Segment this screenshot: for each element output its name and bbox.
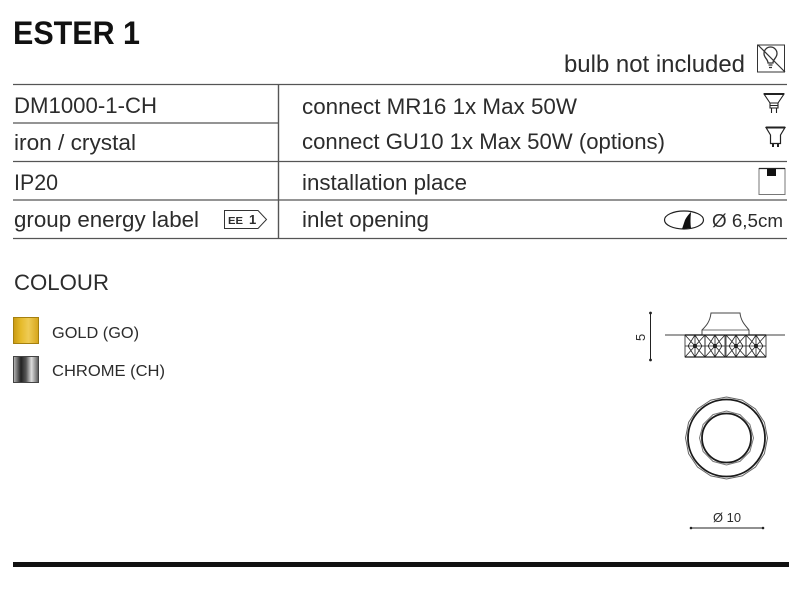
height dimension: 5 <box>633 334 648 341</box>
right column: installation place: installation place <box>302 170 467 195</box>
right column: inlet opening: inlet opening <box>302 207 429 232</box>
icon: energy label tag: 1 <box>249 212 256 227</box>
icon: installation place <box>759 168 785 194</box>
icon: energy label tag: EE <box>228 216 243 227</box>
bottom bar <box>13 562 789 567</box>
diameter dimension: Ø 10 <box>713 510 741 525</box>
right column: MR16 connection: connect MR16 1x Max 50W <box>302 94 577 119</box>
swatch: gold: GOLD (GO) <box>52 325 139 342</box>
icon: energy label tag <box>224 210 266 228</box>
swatch: chrome: CHROME (CH) <box>52 363 165 380</box>
left column: product code: DM1000-1-CH <box>14 93 157 118</box>
left column: energy label text: group energy label <box>14 207 199 232</box>
icon: MR16 bulb <box>764 94 784 113</box>
right column: GU10 connection: connect GU10 1x Max 50W (options) <box>302 129 665 154</box>
specification table <box>13 84 787 239</box>
icon: inlet opening <box>664 211 704 229</box>
swatch: chrome <box>14 356 165 382</box>
title: ESTER 1 <box>13 15 140 51</box>
left column: material: iron / crystal <box>14 130 136 155</box>
swatch: gold <box>14 318 139 344</box>
icon: bulb crossed out <box>758 45 785 72</box>
diameter dimension <box>690 510 764 529</box>
top view drawing <box>686 397 768 479</box>
icon: GU10 bulb <box>766 128 785 147</box>
side view drawing <box>633 312 785 361</box>
bulb not included note: bulb not included <box>564 51 745 78</box>
bulb not included note <box>564 45 785 78</box>
colour heading: COLOUR <box>14 270 109 295</box>
left column: protection rating: IP20 <box>14 170 58 195</box>
height dimension <box>633 312 652 361</box>
inlet diameter value: Ø 6,5cm <box>712 211 783 231</box>
